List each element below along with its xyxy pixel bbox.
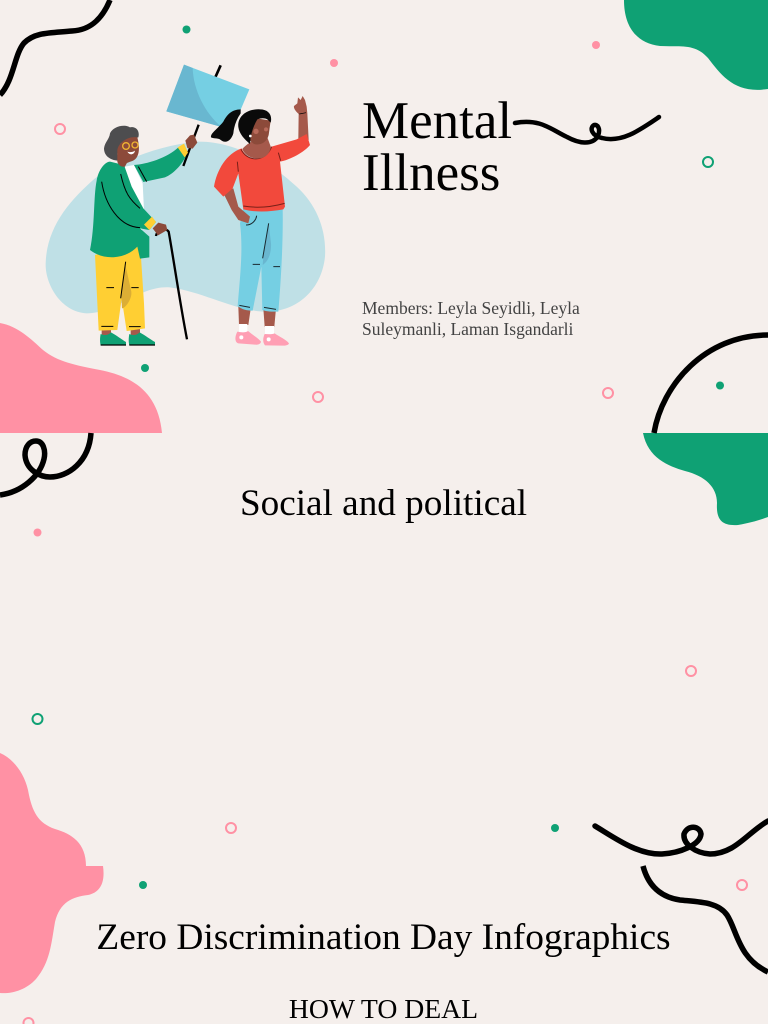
title second line: Illness <box>362 144 500 202</box>
members text: Members: Leyla Seyidli, Leyla <box>362 298 580 318</box>
hair <box>238 109 271 144</box>
squiggle: loop bottom right <box>595 821 768 854</box>
ponytail <box>211 109 241 142</box>
members text <box>362 298 580 339</box>
title: Mental <box>362 92 512 150</box>
jacket <box>90 162 156 259</box>
legs <box>238 307 276 327</box>
illustration: two women protesting <box>46 65 325 346</box>
members text: Suleymanli, Laman Isgandarli <box>362 319 574 339</box>
raised arm and hand <box>294 96 309 140</box>
glasses <box>123 142 138 149</box>
arc: right <box>654 335 768 433</box>
younger woman <box>211 96 310 346</box>
neck and chest skin <box>242 137 271 158</box>
ankles <box>102 328 140 337</box>
blob: green top right <box>624 0 768 90</box>
yellow trousers <box>95 242 145 331</box>
cheeks and earring <box>249 127 268 137</box>
blob: pink upper left <box>0 323 162 433</box>
left arm skin <box>223 188 250 223</box>
face <box>117 137 139 167</box>
heading: social and political: Social and political <box>240 483 527 524</box>
face <box>248 118 271 144</box>
backdrop blob <box>46 142 325 313</box>
squiggle: under title <box>515 117 659 143</box>
pink shoes <box>235 331 289 346</box>
hands <box>153 135 197 235</box>
hair <box>104 126 139 161</box>
blob: pink lower left <box>0 753 104 993</box>
white shirt <box>125 165 144 247</box>
heading: zero discrimination day: Zero Discrimination Day Infographics <box>96 917 671 958</box>
squiggle: top left <box>0 0 110 95</box>
blue jeans <box>238 208 283 312</box>
subheading: how to deal: HOW TO DEAL <box>289 993 478 1024</box>
older woman <box>90 126 197 345</box>
squiggle: loop at left <box>0 433 91 495</box>
squiggle: lower right <box>643 866 768 972</box>
blob: green middle right <box>643 433 768 525</box>
cuffs <box>144 144 188 230</box>
red sweater <box>214 134 310 211</box>
protest sign <box>166 65 249 166</box>
green shoes <box>100 332 155 345</box>
cane <box>156 229 187 339</box>
